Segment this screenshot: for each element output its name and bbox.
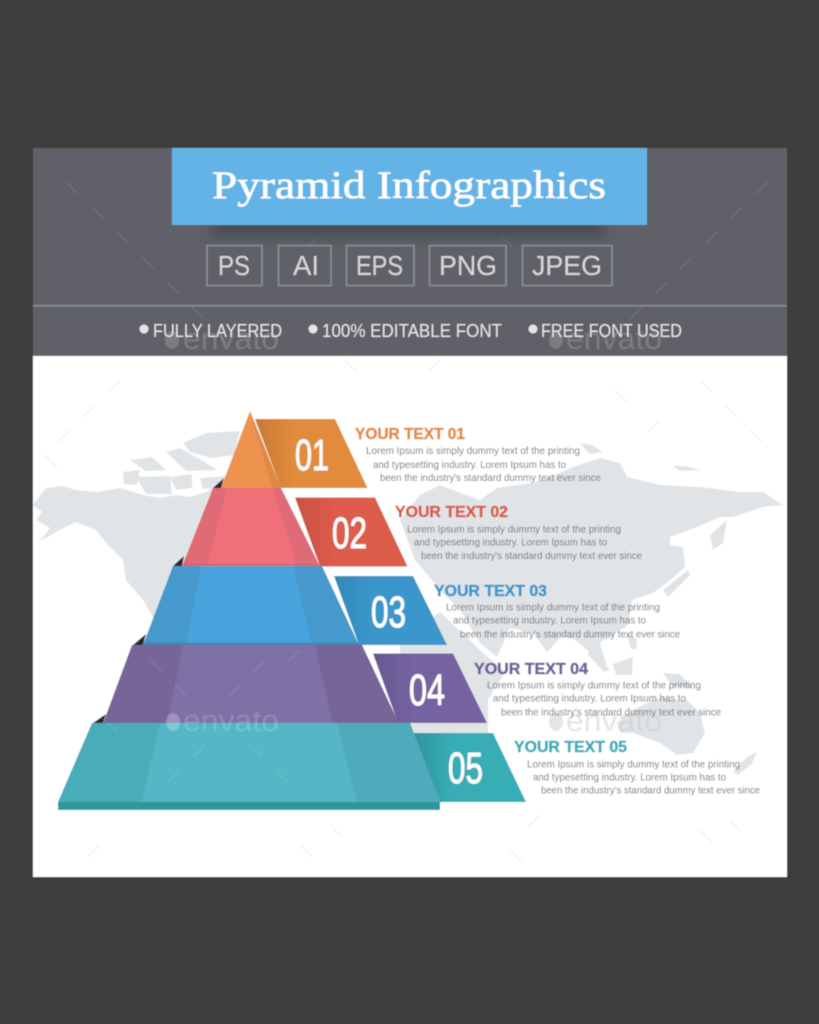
tier 1 top [221,411,281,488]
heading 04: YOUR TEXT 04 [474,661,588,678]
map: Southeast Asia islands [588,633,693,688]
feature list [140,321,682,341]
feature: editable font: 100% EDITABLE FONT [322,321,502,341]
body 05: been the industry's standard dummy text ever since [541,786,760,796]
banner background [172,148,647,225]
tab 02 [295,498,408,566]
watermark: envato map: envato [566,703,662,738]
body 05: and typesetting industry. Lorem Ipsum has to [533,772,726,784]
map: Australia [617,697,705,755]
text block 04 [474,661,721,718]
tab shape 04 [373,654,487,723]
tag: PNG [430,246,506,286]
number 04: 04 [409,666,445,715]
body 01: and typesetting industry. Lorem Ipsum has to [373,460,566,471]
tag: AI: AI [293,250,319,281]
map: Arctic Russia islands [580,443,700,471]
heading 03: YOUR TEXT 03 [434,583,547,600]
map: Kamchatka [710,520,727,550]
text block 01 [355,426,601,484]
body 04: Lorem Ipsum is simply dummy text of the printing [487,680,701,692]
map: Arctic islands [123,431,240,494]
decorative watermark strokes [66,160,768,344]
tab shape 01 [255,419,368,488]
tab shape 03 [334,576,447,645]
watermark: envato pyramid: envato [183,703,279,738]
tab shape 02 [295,498,408,566]
dark fold corners [93,478,410,723]
number 05: 05 [448,744,483,793]
map: New Zealand [733,752,757,775]
heading 02: YOUR TEXT 02 [395,504,508,521]
tab 03 [334,576,447,645]
map: Africa [400,612,505,780]
body 01 [366,446,601,484]
body 01: Lorem Ipsum is simply dummy text of the printing [366,446,580,457]
divider line [33,305,787,306]
feature: fully layered: FULLY LAYERED [153,321,282,341]
text block 02 [395,504,642,562]
body 03: been the industry's standard dummy text ever since [460,630,680,640]
watermark: envato header left: envato [183,321,279,356]
tag: JPEG: JPEG [532,250,602,281]
map: Japan [663,570,690,597]
tier 4 [103,645,399,724]
format tags [207,246,612,286]
panel: white content area [33,356,787,877]
tab 05 [413,733,526,802]
tab shape 05 [413,733,526,802]
body 02: and typesetting industry. Lorem Ipsum has to [414,538,607,548]
heading 01: YOUR TEXT 01 [355,426,465,443]
tier 3 [143,566,359,645]
number 03: 03 [371,588,406,637]
body 04: and typesetting industry. Lorem Ipsum has to [493,694,686,704]
panel: dark header band [33,148,787,356]
body 02: Lorem Ipsum is simply dummy text of the printing [407,524,621,536]
body 02: been the industry's standard dummy text ever since [421,551,642,562]
banner shadow [212,218,604,238]
watermark strokes over pyramid [105,650,300,782]
feature: free font: FREE FONT USED [541,321,682,341]
body 02 [407,524,642,562]
number 02: 02 [332,509,367,558]
map: North America [33,482,240,628]
tier 2 [182,488,320,566]
heading 05: YOUR TEXT 05 [514,739,627,756]
body 03: Lorem Ipsum is simply dummy text of the printing [446,602,660,614]
tag: PS: PS [218,250,250,281]
tab 01 [255,419,368,488]
map: Europe and Asia [400,458,783,667]
pyramid [58,411,440,810]
tag: AI [278,246,331,286]
tag: PNG: PNG [439,250,497,281]
world map [33,431,783,780]
title: Pyramid Infographics [212,164,606,207]
tag: PS [207,246,262,286]
body 05 [527,760,760,796]
body 05: Lorem Ipsum is simply dummy text of the printing [527,760,740,770]
body 01: been the industry's standard dummy text ever since [380,473,601,484]
watermark: envato header right: envato [566,321,662,356]
tag: EPS [346,246,414,286]
tag: EPS: EPS [356,250,403,281]
number 01: 01 [295,431,329,480]
body 04: been the industry's standard dummy text ever since [501,708,721,718]
tab 04 [373,654,487,723]
tier 5 [58,723,440,810]
tag: JPEG [522,246,612,286]
text block 05 [514,739,760,796]
body 04 [487,680,721,718]
body 03: and typesetting industry. Lorem Ipsum has to [453,616,646,626]
text block 03 [434,583,680,640]
body 03 [446,602,680,640]
title banner [172,148,647,238]
